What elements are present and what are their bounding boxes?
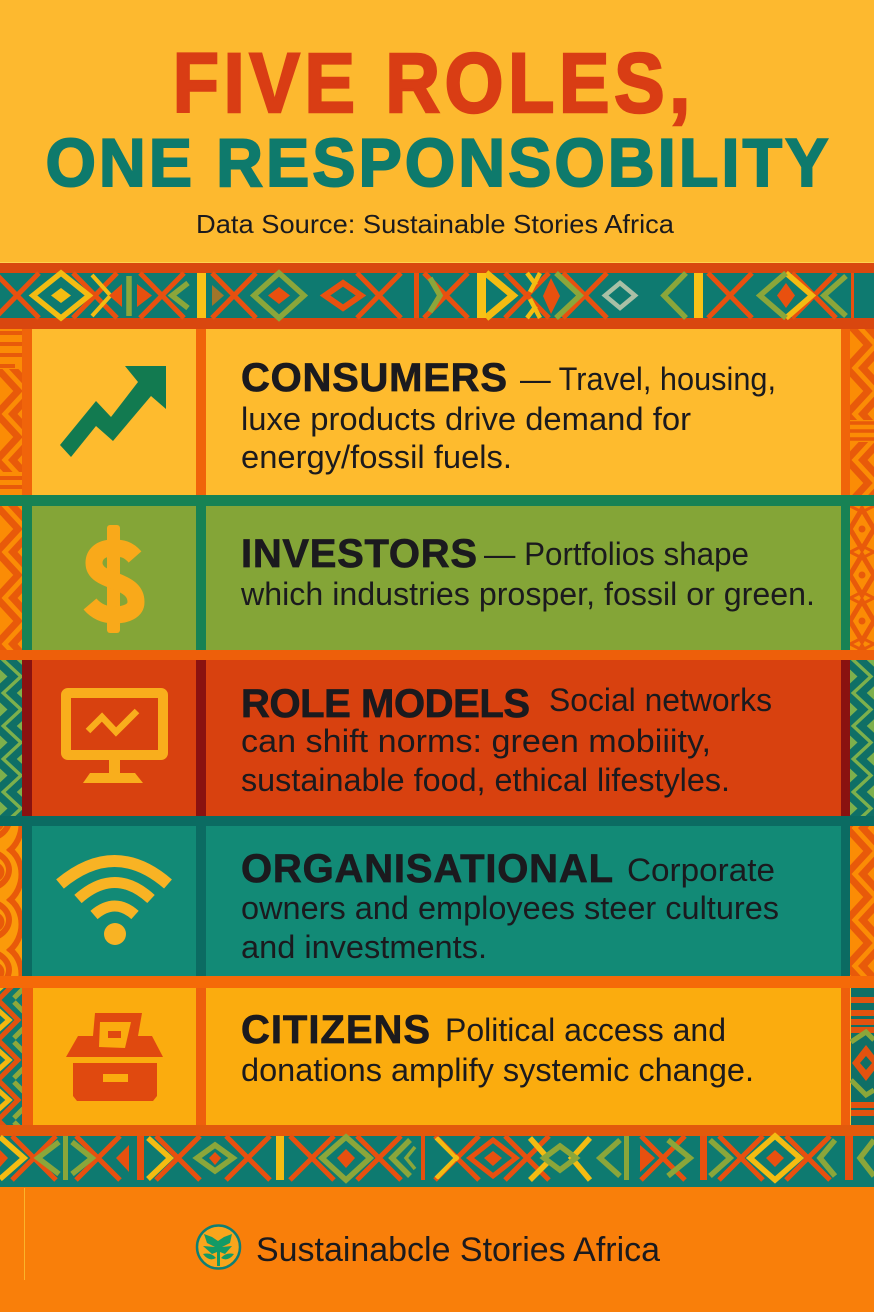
data source line: Data Source: Sustainable Stories Africa	[196, 209, 675, 239]
text: consumers: CONSUMERS	[241, 356, 507, 400]
icon: ballot box	[66, 1013, 163, 1101]
text: investors: — Portfolios shape	[484, 536, 749, 572]
text: citizens: CITIZENS	[241, 1008, 430, 1052]
divider band: teal	[0, 816, 874, 826]
divider band: green	[0, 495, 874, 506]
panel: role models	[22, 660, 850, 816]
text: citizens: donations amplify systemic change.	[241, 1052, 754, 1088]
logo: leaf emblem	[197, 1226, 240, 1268]
bottom patterned band	[0, 1125, 874, 1187]
panel: investors	[22, 506, 850, 650]
divider band: orange	[0, 976, 874, 988]
header background	[0, 0, 874, 263]
divider band: orange	[0, 650, 874, 660]
icon: monitor with chart	[66, 693, 163, 783]
footer brand name: Sustainabcle Stories Africa	[256, 1231, 660, 1269]
panel: organisational	[22, 826, 850, 976]
text: role models: Social networks	[549, 682, 772, 718]
icon: dollar sign	[90, 525, 136, 633]
text: investors: INVESTORS	[241, 532, 477, 576]
text: organisational: and investments.	[241, 929, 487, 965]
top patterned band	[0, 262, 874, 329]
text: investors	[240, 532, 815, 612]
side pattern strips	[0, 329, 874, 1125]
text: organisational	[241, 847, 779, 965]
title: FIVE ROLES,	[173, 36, 690, 130]
text: organisational: ORGANISATIONAL	[241, 847, 613, 891]
text: organisational: owners and employees steer cultures	[241, 890, 779, 926]
text: consumers: energy/fossil fuels.	[241, 439, 512, 475]
panel: citizens	[22, 988, 850, 1125]
title	[46, 36, 828, 201]
footer background	[0, 1187, 874, 1312]
text: role models: sustainable food, ethical lifestyles.	[241, 762, 730, 798]
text: role models: can shift norms: green mobiiity,	[241, 723, 711, 759]
icon: rising arrow	[60, 366, 166, 457]
text: consumers: — Travel, housing,	[520, 361, 776, 397]
text: investors: which industries prosper, fossil or green.	[240, 576, 815, 612]
text: citizens	[241, 1008, 754, 1088]
panel: consumers	[22, 329, 850, 495]
text: role models	[241, 682, 772, 798]
text: citizens: Political access and	[445, 1012, 726, 1048]
text: consumers	[241, 356, 776, 475]
text: role models: ROLE MODELS	[241, 682, 530, 726]
title: ONE RESPONSOBILITY	[46, 126, 828, 201]
icon: wifi signal	[60, 861, 168, 945]
text: consumers: luxe products drive demand for	[241, 401, 691, 437]
text: organisational: Corporate	[627, 852, 775, 888]
